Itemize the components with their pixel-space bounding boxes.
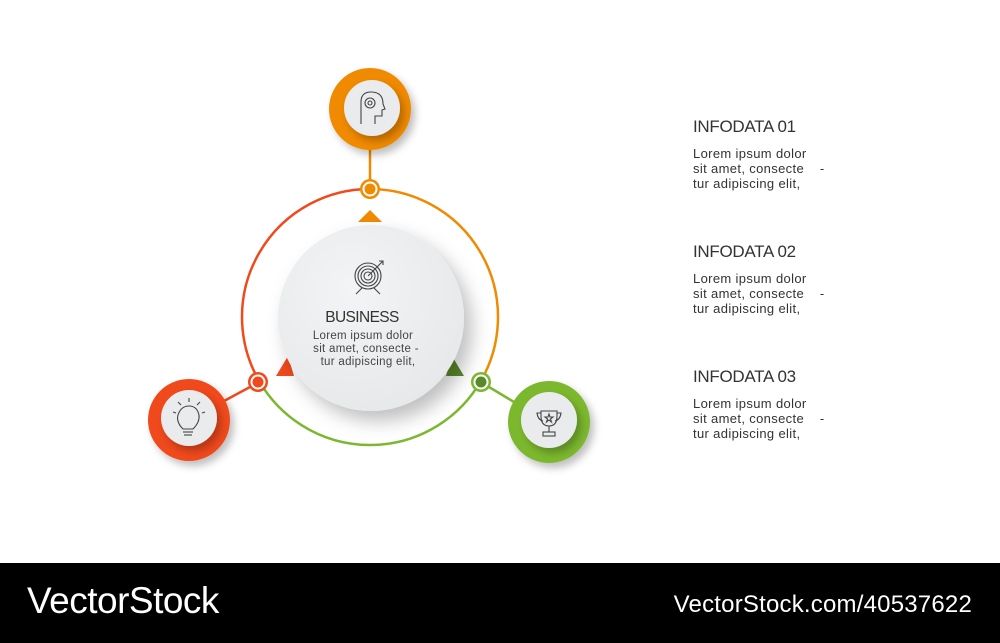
info block 03: tur adipiscing elit, <box>693 426 800 441</box>
center disc <box>278 225 464 411</box>
info block 02: Lorem ipsum dolor <box>693 271 807 286</box>
info block 01: INFODATA 01 <box>693 117 796 136</box>
ring dots <box>248 179 491 392</box>
info block 01 <box>693 117 825 191</box>
center text: tur adipiscing elit, <box>321 356 415 368</box>
info block 02 <box>693 242 825 316</box>
center text: sit amet, consecte - <box>313 343 419 355</box>
info block 02: tur adipiscing elit, <box>693 301 800 316</box>
node: top head <box>329 68 411 150</box>
info block 01: sit amet, consecte - <box>693 161 825 176</box>
info block 02: sit amet, consecte - <box>693 286 825 301</box>
connectors <box>224 150 514 402</box>
node: right trophy <box>508 381 590 463</box>
icon: target <box>355 261 383 294</box>
footer bar <box>0 563 1000 643</box>
node: left bulb <box>148 379 230 461</box>
info block 03: INFODATA 03 <box>693 367 796 386</box>
info block 02: INFODATA 02 <box>693 242 796 261</box>
footer url: VectorStock.com/40537622 <box>674 591 972 618</box>
footer logo: VectorStock <box>27 580 219 621</box>
info block 01: Lorem ipsum dolor <box>693 146 807 161</box>
center title: BUSINESS <box>325 309 399 326</box>
info block 03: sit amet, consecte - <box>693 411 825 426</box>
arrow triangles <box>276 210 464 376</box>
info block 03: Lorem ipsum dolor <box>693 396 807 411</box>
info block 03 <box>693 367 825 441</box>
ring arcs <box>242 189 498 445</box>
center text: Lorem ipsum dolor <box>313 330 413 342</box>
info block 01: tur adipiscing elit, <box>693 176 800 191</box>
